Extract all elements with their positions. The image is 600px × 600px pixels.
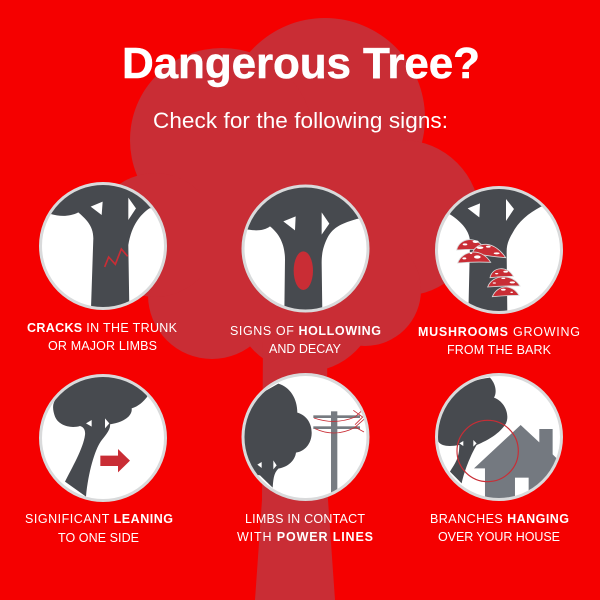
label: cracks: OR MAJOR LIMBS	[48, 339, 157, 353]
icon: tree and power pole	[240, 374, 368, 500]
background tree silhouette	[93, 18, 480, 600]
label: power lines: LIMBS IN CONTACT	[245, 512, 365, 526]
label: mushrooms: FROM THE BARK	[447, 343, 552, 357]
label: leaning: SIGNIFICANT LEANING	[25, 512, 173, 526]
label: house: BRANCHES HANGING	[430, 512, 569, 526]
panel: hollowing	[230, 183, 381, 356]
panel: cracks	[27, 175, 178, 353]
icon: tree over house	[436, 374, 563, 505]
icon: tree with hollow	[240, 183, 370, 313]
title: Dangerous Tree?	[122, 39, 480, 88]
icon: tree with crack	[39, 182, 167, 310]
label: leaning: TO ONE SIDE	[58, 531, 139, 545]
subtitle: Check for the following signs:	[153, 108, 448, 133]
label: hollowing	[230, 324, 381, 356]
label: cracks	[27, 321, 178, 353]
label: house	[430, 512, 569, 544]
label: hollowing: AND DECAY	[269, 342, 342, 356]
label: power lines	[237, 512, 373, 544]
label: mushrooms	[418, 325, 580, 357]
panel: mushrooms	[418, 185, 580, 357]
icon: leaning tree with arrow	[40, 376, 166, 500]
panel: leaning	[25, 376, 173, 545]
panel: power lines	[237, 374, 373, 544]
label: mushrooms: MUSHROOMS GROWING	[418, 325, 580, 339]
label: hollowing: SIGNS OF HOLLOWING	[230, 324, 381, 338]
label: house: OVER YOUR HOUSE	[438, 530, 560, 544]
label: cracks: CRACKS IN THE TRUNK	[27, 321, 178, 335]
label: leaning	[25, 512, 173, 545]
label: power lines: WITH POWER LINES	[237, 530, 373, 544]
panel: house	[430, 374, 569, 544]
icon: tree with mushrooms	[435, 185, 565, 315]
